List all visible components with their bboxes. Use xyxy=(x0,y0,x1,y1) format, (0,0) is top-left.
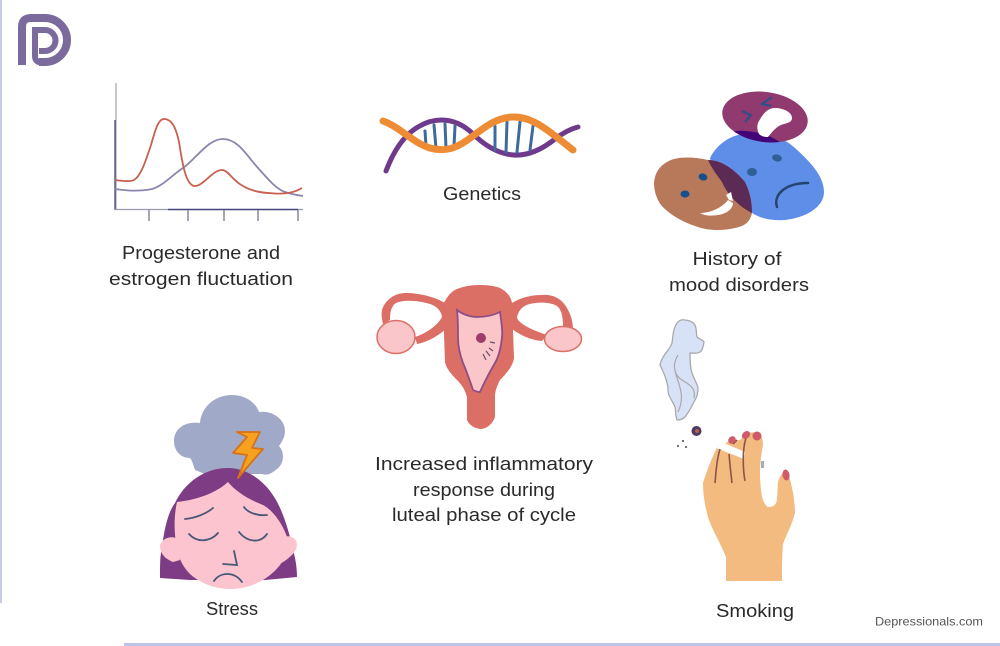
hand xyxy=(703,432,795,581)
watermark: Depressionals.com xyxy=(875,614,983,628)
line chart: progesterone and estrogen xyxy=(114,83,303,221)
right ear xyxy=(280,536,297,564)
hair xyxy=(160,468,297,580)
icon: uterus xyxy=(377,285,582,429)
label: progesterone and estrogen: estrogen fluctuation xyxy=(109,269,293,289)
icon: DNA helix xyxy=(383,117,578,171)
label: inflammatory response: luteal phase of cycle xyxy=(392,505,576,525)
progesterone curve xyxy=(115,119,302,194)
lightning bolt xyxy=(233,432,263,478)
face xyxy=(175,482,287,589)
icon: stressed face xyxy=(160,395,297,589)
label: genetics: Genetics xyxy=(443,184,521,204)
label: history of mood disorders xyxy=(669,249,809,295)
label: inflammatory response xyxy=(375,454,593,525)
brown happy face xyxy=(654,158,752,230)
icon: smoking hand xyxy=(660,320,795,581)
nails xyxy=(727,435,737,445)
finger lines xyxy=(715,438,746,483)
storm cloud xyxy=(174,395,285,475)
left ear xyxy=(160,537,180,562)
label: inflammatory response: Increased inflammatory xyxy=(375,454,593,474)
estrogen curve xyxy=(115,139,303,196)
icon: mood faces xyxy=(654,86,824,230)
label: progesterone and estrogen xyxy=(109,243,293,289)
label: stress: Stress xyxy=(206,599,258,619)
blue sad face xyxy=(710,133,824,220)
logo xyxy=(22,18,67,65)
ember xyxy=(692,426,702,436)
smoke xyxy=(660,320,704,420)
label: history of mood disorders: mood disorders xyxy=(669,275,809,295)
cigarette xyxy=(716,443,745,459)
label: smoking: Smoking xyxy=(716,601,794,621)
label: inflammatory response: response during xyxy=(413,480,555,500)
maroon laughing face xyxy=(722,92,808,142)
label: history of mood disorders: History of xyxy=(692,249,783,269)
label: progesterone and estrogen: Progesterone and xyxy=(122,243,280,263)
